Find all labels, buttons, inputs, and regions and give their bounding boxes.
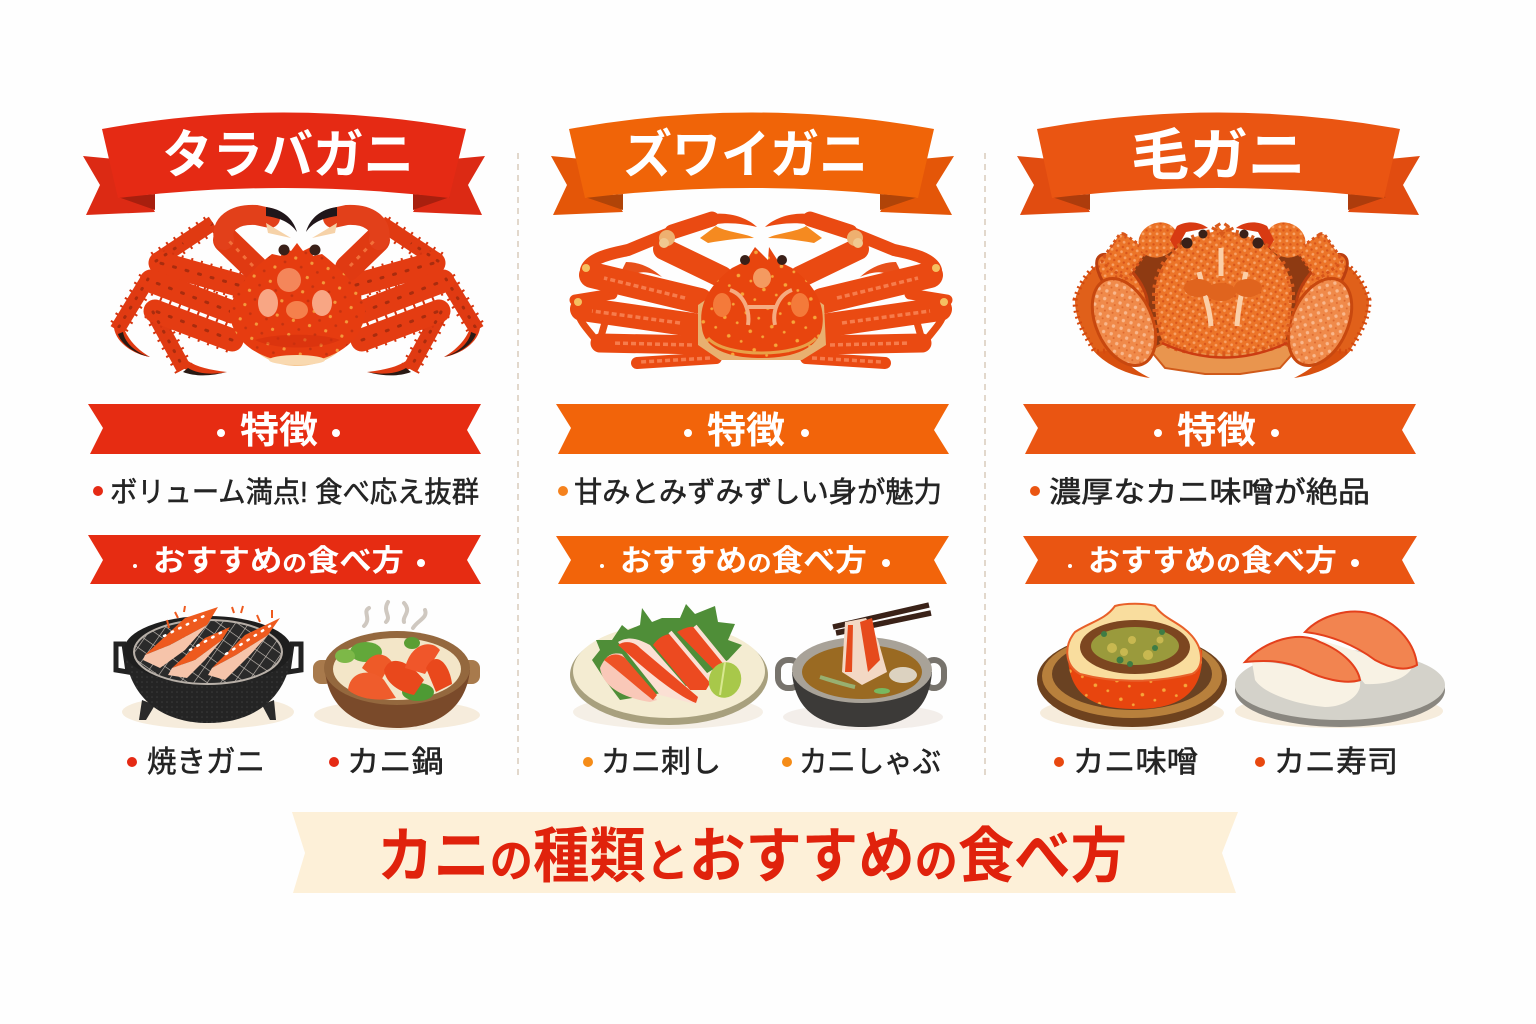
dish: カニしゃぶ [778,605,944,779]
dish: 焼きガニ [116,606,301,779]
ribbon: 特徴: 特徴 [707,410,785,451]
title banner [292,812,1238,893]
dish: 焼きガニ: 焼きガニ [147,746,265,779]
divider left [517,153,519,776]
dish: カニ鍋: カニ鍋 [347,746,444,779]
ribbon: おすすめの食べ方: おすすめ の食べ方 [153,545,404,578]
dish: カニ寿司: カニ寿司 [1274,746,1398,779]
ribbon: おすすめの食べ方: おすすめ の食べ方 [620,545,867,578]
divider right [984,153,986,776]
title banner: カニの種類とおすすめの食べ方 [377,823,1127,890]
dish: カニ寿司 [1235,612,1445,779]
dish: カニ味噌 [1037,604,1227,779]
ribbon: おすすめの食べ方 [88,535,481,584]
heading ribbon: 毛ガニ [1017,112,1420,215]
feature text: ボリューム満点! 食べ応え抜群 [110,476,479,509]
crab illustration: ズワイガニ [574,214,948,363]
panel: ズワイガニ [551,112,954,779]
ribbon: 特徴 [1023,404,1416,454]
panel: タラバガニ [83,112,485,779]
dish: カニ味噌: カニ味噌 [1073,746,1198,779]
heading ribbon: ズワイガニ [551,112,954,215]
panel: 毛ガニ [1017,112,1445,779]
heading ribbon: ズワイガニ: ズワイガニ [623,127,868,185]
dish: カニ刺し [570,604,768,779]
ribbon: おすすめの食べ方: おすすめ の食べ方 [1088,545,1337,578]
heading ribbon: タラバガニ [83,112,485,215]
heading ribbon: タラバガニ: タラバガニ [162,127,414,185]
heading ribbon: 毛ガニ: 毛ガニ [1131,124,1306,187]
dish: カニしゃぶ: カニしゃぶ [799,746,941,779]
ribbon: おすすめの食べ方 [1023,536,1417,584]
ribbon: 特徴 [88,404,481,454]
crab illustration: 毛ガニ [1075,216,1369,378]
ribbon: 特徴: 特徴 [240,410,318,451]
ribbon: 特徴 [556,404,949,454]
crab illustration: タラバガニ [114,207,480,375]
ribbon: 特徴: 特徴 [1177,410,1256,451]
dish: カニ刺し: カニ刺し [601,746,721,779]
feature text: 甘みとみずみずしい身が魅力 [574,476,942,509]
dish: カニ鍋 [313,602,480,779]
ribbon: おすすめの食べ方 [556,536,949,584]
feature text: 濃厚なカニ味噌が絶品 [1049,476,1370,509]
